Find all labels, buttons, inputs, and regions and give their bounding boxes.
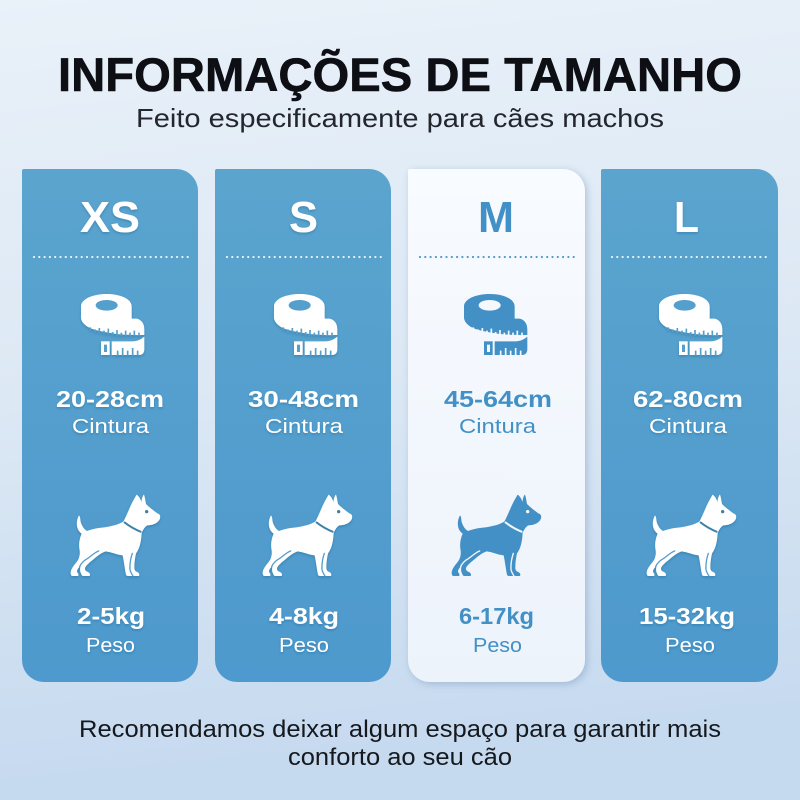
panel: M xyxy=(408,169,585,682)
size label S: S xyxy=(289,193,318,242)
size label L: L xyxy=(674,193,699,242)
waist value S: 30-48cm xyxy=(248,386,359,412)
weight label M: Peso xyxy=(473,635,522,657)
title: INFORMAÇÕES DE TAMANHO xyxy=(58,48,742,101)
waist label M: Cintura xyxy=(459,416,537,438)
weight value XS: 2-5kg xyxy=(77,603,145,629)
waist value L: 62-80cm xyxy=(633,386,743,412)
footer note: conforto ao seu cão xyxy=(288,744,512,771)
panel: L xyxy=(601,169,778,682)
waist label XS: Cintura xyxy=(72,416,150,438)
icon: measuring tape L xyxy=(659,294,722,356)
waist value M: 45-64cm xyxy=(444,386,552,412)
waist label L: Cintura xyxy=(649,416,728,438)
icon: dog S xyxy=(263,495,352,576)
icon: measuring tape S xyxy=(274,294,337,356)
weight value M: 6-17kg xyxy=(459,603,534,629)
weight value S: 4-8kg xyxy=(269,603,339,629)
waist value XS: 20-28cm xyxy=(56,386,164,412)
panel: S xyxy=(215,169,391,682)
icon: dog XS xyxy=(71,495,160,576)
weight label L: Peso xyxy=(665,635,715,657)
subtitle: Feito especificamente para cães machos xyxy=(136,103,664,133)
icon: measuring tape M xyxy=(464,294,527,356)
size label M: M xyxy=(478,193,514,242)
footer note xyxy=(79,716,721,771)
weight label XS: Peso xyxy=(86,635,135,657)
waist label S: Cintura xyxy=(265,416,344,438)
icon: dog L xyxy=(647,495,736,576)
weight value L: 15-32kg xyxy=(639,603,735,629)
panel: XS xyxy=(22,169,198,682)
weight label S: Peso xyxy=(279,635,329,657)
icon: measuring tape XS xyxy=(81,294,144,356)
size label XS: XS xyxy=(80,193,140,242)
icon: dog M xyxy=(452,495,541,576)
footer note: Recomendamos deixar algum espaço para garantir mais xyxy=(79,716,721,743)
